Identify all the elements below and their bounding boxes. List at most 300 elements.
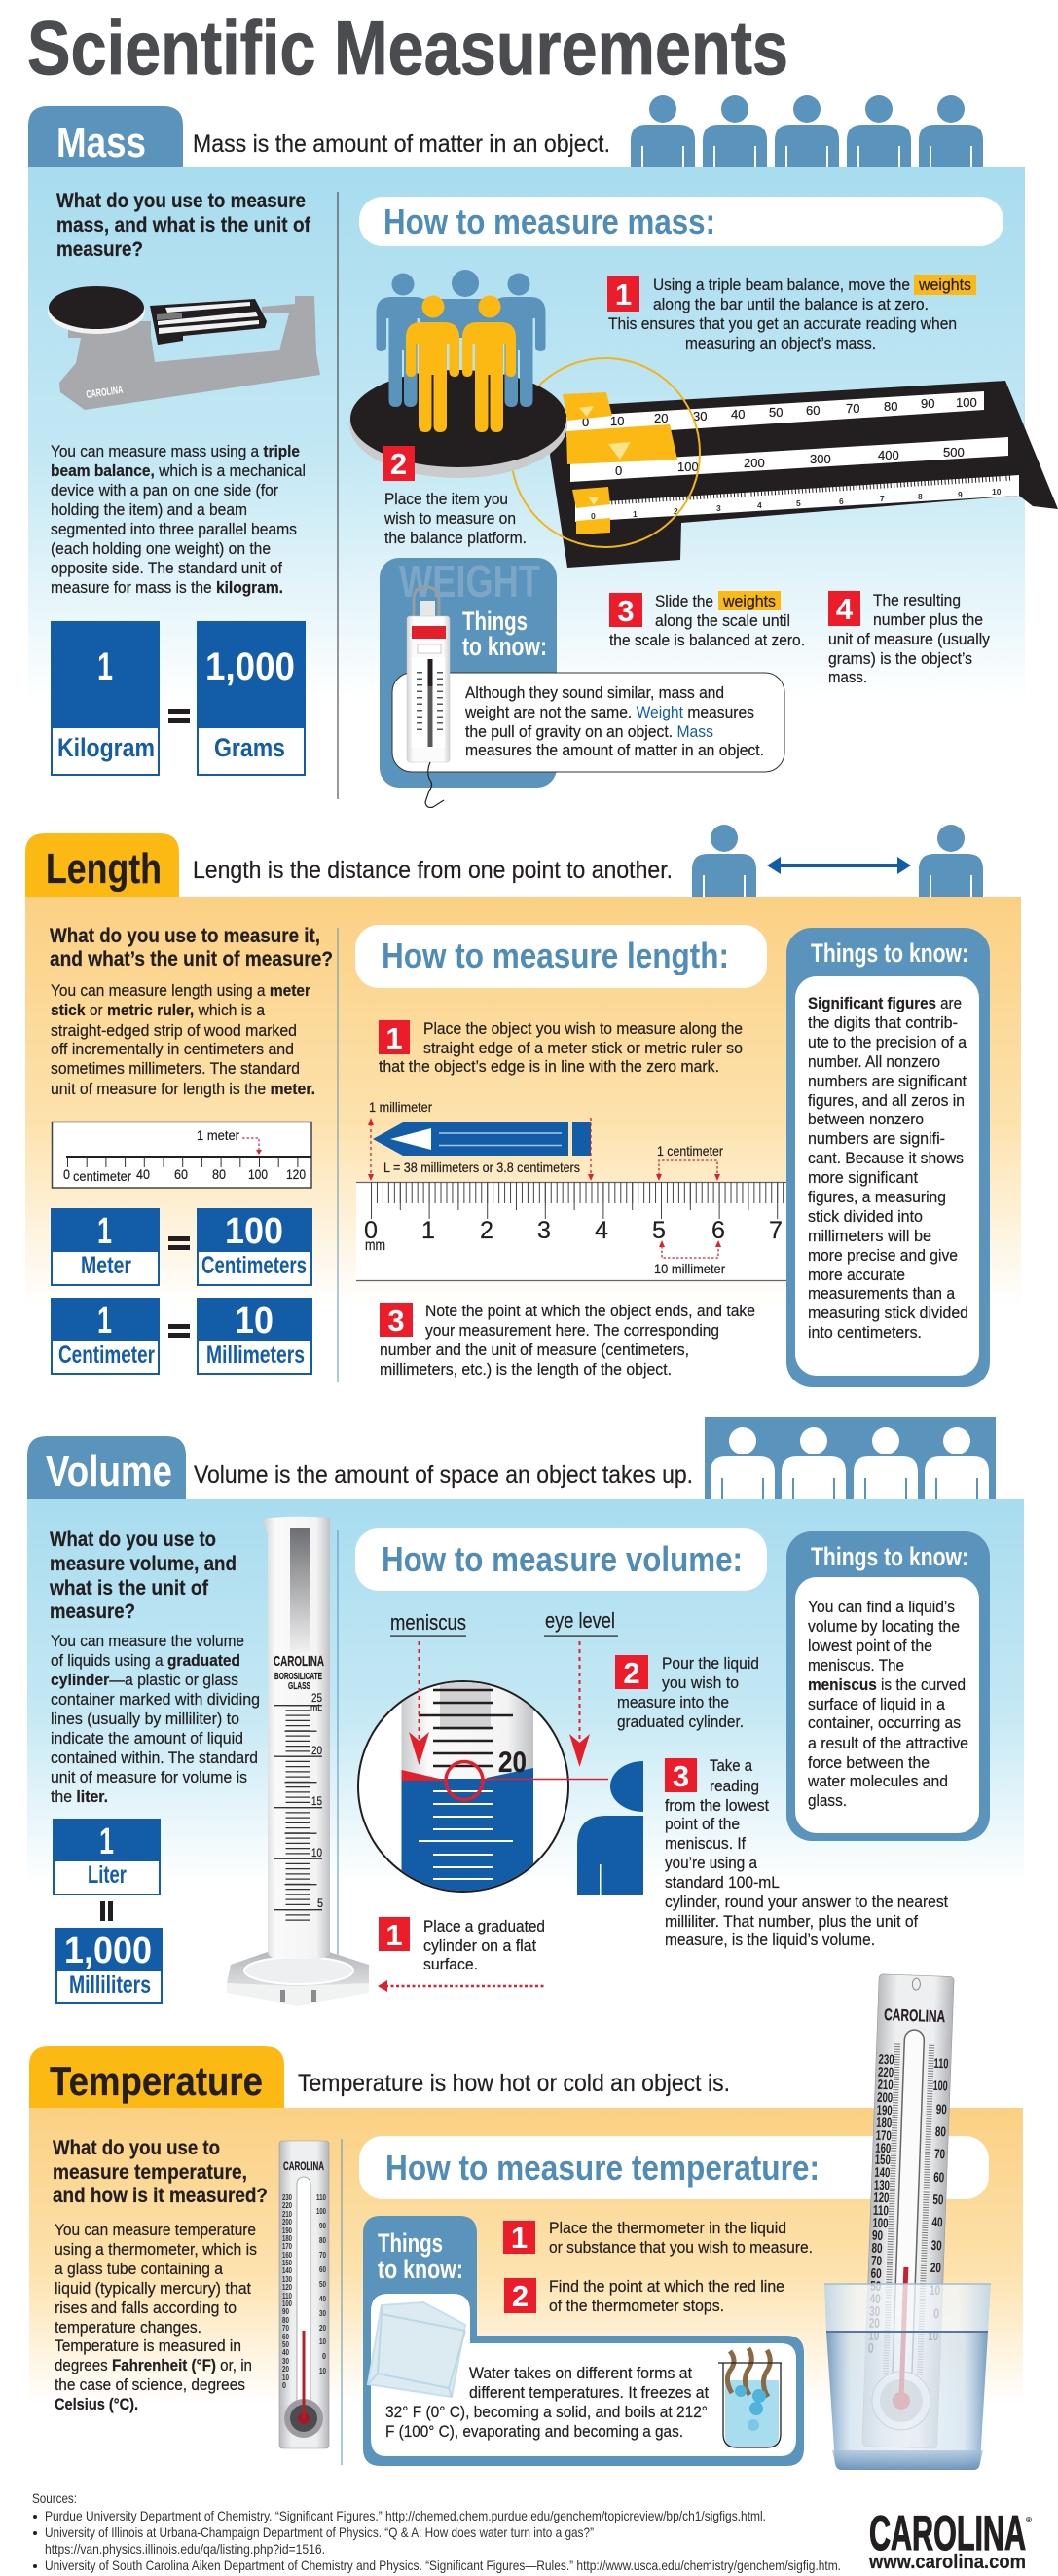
small thermometer: 210 <box>282 2209 292 2219</box>
unit box: 1 centimeter: Centimeter <box>58 1342 155 1369</box>
meniscus and eye level labels with arrows: eye level <box>545 1608 615 1633</box>
unit box: 100 centimeters: Centimeters <box>201 1252 307 1279</box>
unit box: 100 centimeters: 100 <box>225 1211 283 1252</box>
sources: https://van.physics.illinois.edu/qa/listing.php?id=1516. <box>45 2541 325 2557</box>
big thermometer: 120 <box>873 2190 890 2205</box>
volume explanation text: unit of measure for volume is <box>51 1768 247 1786</box>
beam three: 2 <box>674 506 678 516</box>
length step 3: 3 <box>387 1304 405 1338</box>
volume things to know panel <box>786 1531 990 1841</box>
temperature explanation text: You can measure temperature <box>55 2221 256 2239</box>
length tab: Length <box>46 845 162 893</box>
big thermometer: 70 <box>934 2146 946 2161</box>
temperature things to know panel: different temperatures. It freezes at <box>469 2383 709 2402</box>
balance pan with people <box>349 270 567 478</box>
big thermometer: 100 <box>872 2215 889 2230</box>
temperature definition: Temperature is how hot or cold an object is. <box>298 2070 730 2097</box>
beam one: 80 <box>884 399 897 414</box>
length explanation text: off incrementally in centimeters and <box>51 1040 294 1058</box>
unit box: 100 centimeters <box>197 1208 312 1285</box>
carolina logo: ® <box>1026 2516 1032 2524</box>
length things to know panel: measuring stick divided <box>808 1304 968 1322</box>
length question heading <box>50 925 333 971</box>
big thermometer: 40 <box>931 2214 943 2229</box>
mass explanation text: holding the item) and a beam <box>51 500 247 519</box>
volume step 3: you’re using a <box>665 1854 757 1872</box>
how to measure volume heading <box>355 1528 767 1591</box>
big thermometer: 50 <box>932 2191 944 2207</box>
small thermometer: 110 <box>316 2192 326 2202</box>
volume step 3: 3 <box>673 1759 689 1793</box>
length definition: Length is the distance from one point to another. <box>193 857 673 884</box>
small thermometer: 0 <box>282 2380 286 2390</box>
mass step 4: The resulting <box>873 591 961 609</box>
unit box: 1,000 milliliters: 1,000 <box>64 1931 152 1971</box>
temperature things to know panel <box>363 2216 804 2466</box>
length step 1: 1 <box>385 1021 403 1055</box>
weight things to know panel: WEIGHT <box>399 556 540 607</box>
mass step 3: weights <box>722 592 776 610</box>
beam two: 300 <box>810 452 831 466</box>
mass explanation text <box>51 442 306 597</box>
graduated cylinder: 10 <box>311 1846 322 1859</box>
beam one: 90 <box>921 396 934 411</box>
unit box: 1,000 milliliters: Milliliters <box>69 1971 151 1999</box>
equals sign rotated <box>100 1901 113 1921</box>
length things to know panel <box>786 928 990 1387</box>
unit box: 1 meter: 1 <box>97 1211 112 1252</box>
mass step 1: measuring an object’s mass. <box>685 334 876 352</box>
mass step 1: weights <box>918 276 971 294</box>
carolina logo: www.carolina.com <box>868 2552 1026 2573</box>
temperature explanation text: Temperature is measured in <box>55 2337 241 2355</box>
length step 1: that the object’s edge is in line with the zero mark. <box>379 1057 719 1076</box>
weight things to know panel: Things <box>462 607 528 636</box>
temperature tab <box>29 2046 284 2108</box>
volume explanation text: the liter. <box>51 1787 108 1806</box>
mass step 2 <box>383 446 527 547</box>
mass step 1: Using a triple beam balance, move the <box>653 276 910 294</box>
volume step 3: from the lowest <box>665 1796 769 1815</box>
volume step 1 <box>378 1917 545 1992</box>
big thermometer: 80 <box>871 2240 883 2256</box>
big thermometer: 220 <box>878 2064 894 2079</box>
volume step 2: Pour the liquid <box>662 1654 759 1673</box>
temperature step 1 <box>503 2219 813 2257</box>
title: Scientific Measurements <box>27 5 788 91</box>
graduated cylinder: BOROSILICATE <box>274 1672 322 1682</box>
volume step 3: meniscus. If <box>665 1834 746 1853</box>
unit box: 10 millimeters <box>197 1298 312 1374</box>
length step 3: millimeters, etc.) is the length of the object. <box>380 1360 672 1379</box>
temperature step 2 <box>504 2277 784 2315</box>
mass explanation text: beam balance, which is a mechanical <box>51 461 306 480</box>
sources: Purdue University Department of Chemistry. “Significant Figures.” http://chemed.chem.purdue.edu/genchem/topicreview/bp/ch1/sigfigs.html. <box>45 2508 766 2523</box>
length step 3: your measurement here. The corresponding <box>425 1321 719 1340</box>
meniscus and eye level labels with arrows: meniscus <box>390 1610 466 1635</box>
column divider <box>337 192 339 799</box>
small thermometer: 50 <box>282 2339 289 2349</box>
weight callout: measures the amount of matter in an object. <box>465 741 764 759</box>
big thermometer: 170 <box>875 2127 892 2143</box>
beam three: 4 <box>757 500 762 510</box>
beam one: 30 <box>693 409 707 423</box>
graduated cylinder: CAROLINA <box>274 1653 324 1670</box>
mass question heading: mass, and what is the unit of <box>56 214 311 237</box>
mass definition: Mass is the amount of matter in an object. <box>193 130 610 158</box>
unit box: 1 liter <box>53 1819 161 1895</box>
red dashed arrows <box>409 1641 590 1767</box>
beam two: 200 <box>744 456 765 470</box>
small thermometer: 160 <box>282 2250 292 2260</box>
how to measure length heading <box>355 925 767 988</box>
volume explanation text: cylinder—a plastic or glass <box>51 1671 238 1689</box>
mass step 3: the scale is balanced at zero. <box>609 631 805 649</box>
unit box: 1 centimeter: 1 <box>97 1301 112 1342</box>
beam one: 40 <box>731 407 745 422</box>
ruler: mm <box>365 1237 385 1254</box>
small thermometer: 90 <box>282 2306 289 2316</box>
how to measure volume heading: How to measure volume: <box>382 1539 743 1579</box>
volume question heading: measure volume, and <box>50 1553 237 1575</box>
unit box: 1,000 milliliters <box>55 1928 163 2003</box>
small thermometer: 130 <box>282 2274 292 2284</box>
beam three: 5 <box>796 498 801 508</box>
small thermometer: 80 <box>282 2315 289 2325</box>
meter stick diagram: 120 <box>286 1166 306 1182</box>
weight things to know panel <box>380 556 784 807</box>
big thermometer: 50 <box>870 2278 882 2294</box>
temperature step 2: 2 <box>512 2279 529 2313</box>
weight callout: the pull of gravity on an object. Mass <box>465 722 713 741</box>
length step 1: straight edge of a meter stick or metric ruler so <box>423 1039 743 1057</box>
volume step 3: standard 100-mL <box>665 1873 780 1892</box>
small thermometer: 60 <box>319 2264 326 2274</box>
temperature step 1: Place the thermometer in the liquid <box>549 2219 786 2237</box>
small thermometer: 40 <box>282 2347 289 2357</box>
equals sign <box>168 709 190 723</box>
unit box: 1 liter: 1 <box>99 1822 114 1862</box>
weight callout <box>392 673 784 772</box>
small thermometer: 80 <box>319 2235 326 2245</box>
mass step 3: along the scale until <box>655 611 790 630</box>
section: mass <box>28 95 1058 807</box>
beam three: 10 <box>992 487 1002 497</box>
temperature question heading: measure temperature, <box>53 2161 247 2184</box>
length things to know panel: number. All nonzero <box>808 1052 940 1071</box>
unit box: 10 millimeters: Millimeters <box>206 1342 305 1369</box>
volume things to know panel: lowest point of the <box>808 1637 932 1655</box>
beam three: 9 <box>958 490 963 499</box>
ruler: 6 <box>711 1217 725 1244</box>
unit box: 1,000 grams: 1,000 <box>205 645 295 688</box>
temperature explanation text: a glass tube containing a <box>55 2260 223 2278</box>
triple beam balance illustration <box>48 286 320 410</box>
sources <box>32 2490 841 2573</box>
meter stick diagram: 80 <box>212 1166 226 1182</box>
unit box: 1,000 grams: Grams <box>214 733 285 762</box>
unit box: 1 meter <box>51 1208 160 1285</box>
big thermometer: 190 <box>876 2102 893 2117</box>
beam three: 7 <box>880 494 885 503</box>
length things to know panel: into centimeters. <box>808 1323 922 1342</box>
big thermometer: 110 <box>933 2055 949 2071</box>
ruler: 1 <box>421 1217 435 1244</box>
big thermometer: 20 <box>930 2260 941 2275</box>
small thermometer <box>279 2141 329 2448</box>
temperature explanation text: liquid (typically mercury) that <box>55 2279 251 2298</box>
volume step 3: cylinder, round your answer to the nearest <box>665 1893 948 1911</box>
unit box: 1 meter: Meter <box>81 1252 131 1279</box>
volume things to know panel: glass. <box>808 1791 847 1810</box>
big thermometer: 0 <box>933 2305 940 2321</box>
volume step 2: 2 <box>623 1656 640 1690</box>
length explanation text: You can measure length using a meter <box>51 981 310 1000</box>
big thermometer: 60 <box>933 2169 945 2185</box>
volume things to know panel: a result of the attractive <box>808 1734 968 1752</box>
big thermometer: 20 <box>869 2315 880 2331</box>
beam three: 6 <box>839 497 844 506</box>
sources: University of Illinois at Urbana-Champaign Department of Physics. “Q & A: How does water turn into a gas?” <box>45 2524 594 2540</box>
beam three <box>575 474 1019 522</box>
section: volume <box>27 1417 1024 2006</box>
weight things to know panel: to know: <box>462 632 547 661</box>
beam two: 0 <box>615 463 622 478</box>
icon: blue figures <box>376 270 545 407</box>
mass explanation text: (each holding one weight) on the <box>51 539 271 558</box>
small thermometer: 40 <box>319 2294 326 2303</box>
big thermometer: 30 <box>930 2237 942 2253</box>
small thermometer: 150 <box>282 2258 292 2267</box>
glass of water <box>824 2284 991 2470</box>
temperature things to know panel: 32° F (0° C), becoming a solid, and boils at 212° <box>385 2403 708 2421</box>
volume question heading: measure? <box>50 1601 135 1623</box>
meter stick diagram: 60 <box>174 1166 188 1182</box>
volume explanation text: indicate the amount of liquid <box>51 1729 243 1748</box>
length things to know panel: stick divided into <box>808 1207 923 1226</box>
length things to know panel: measurements than a <box>808 1284 956 1303</box>
sources: University of South Carolina Aiken Department of Chemistry and Physics. “Significant Figures—Rules.” http://www.usca.edu/chemistry/genchem/sigfig.htm. <box>45 2558 841 2573</box>
small thermometer: 190 <box>282 2226 292 2235</box>
big thermometer: 180 <box>876 2115 893 2130</box>
yellow weights <box>563 392 677 534</box>
beam two: 100 <box>677 460 699 474</box>
small thermometer: 140 <box>282 2265 292 2275</box>
spring balance <box>407 587 450 807</box>
how to measure temperature heading <box>359 2136 989 2199</box>
icon: ice cube <box>368 2302 465 2397</box>
big thermometer: 210 <box>877 2077 894 2092</box>
beam one: 50 <box>769 405 783 420</box>
mass step 1 <box>607 275 976 352</box>
mass step 2: wish to measure on <box>383 509 516 528</box>
length question heading: and what’s the unit of measure? <box>50 948 333 971</box>
small thermometer: 100 <box>282 2299 292 2308</box>
beam three: 1 <box>633 509 638 519</box>
unit box: 1,000 grams <box>197 621 306 775</box>
length things to know panel: cant. Because it shows <box>808 1149 964 1167</box>
length things to know panel: numbers are signifi- <box>808 1129 945 1148</box>
length things to know panel: more precise and give <box>808 1246 958 1265</box>
small thermometer: 120 <box>282 2282 292 2292</box>
beam one: 20 <box>654 411 668 425</box>
beam one: 100 <box>956 395 977 410</box>
magnified meniscus view: 20 <box>498 1747 527 1779</box>
mass step 3: 3 <box>617 594 635 628</box>
length explanation text: straight-edged strip of wood marked <box>51 1021 297 1040</box>
length explanation text: stick or metric ruler, which is a <box>51 1001 265 1019</box>
weight callout: Although they sound similar, mass and <box>465 683 724 702</box>
length explanation text <box>51 981 315 1098</box>
magnifier circle <box>511 358 700 547</box>
meter stick diagram: 1 meter <box>197 1127 239 1143</box>
mass step 3 <box>609 591 805 649</box>
small thermometer: 70 <box>319 2250 326 2260</box>
mass tab <box>28 106 183 167</box>
meter stick diagram: 40 <box>136 1166 150 1182</box>
temperature explanation text <box>55 2221 257 2413</box>
beam one: 10 <box>610 414 624 428</box>
length things to know panel: figures, and all zeros in <box>808 1091 965 1110</box>
temperature panel background <box>29 2108 1023 2405</box>
meter stick diagram: 0 <box>63 1166 70 1182</box>
volume step 2: you wish to <box>662 1674 739 1692</box>
volume explanation text <box>51 1632 260 1806</box>
big thermometer: 0 <box>868 2340 874 2356</box>
small thermometer: 100 <box>316 2206 326 2216</box>
mass step 4: number plus the <box>873 610 983 629</box>
ruler <box>356 1182 786 1281</box>
sources: Sources: <box>32 2490 77 2506</box>
unit box: 1 kilogram: Kilogram <box>57 733 155 762</box>
volume things to know panel: Things to know: <box>811 1542 968 1571</box>
length question heading: What do you use to measure it, <box>50 925 320 947</box>
volume panel background <box>27 1499 1024 1884</box>
big thermometer: 100 <box>932 2078 948 2093</box>
temperature explanation text: degrees Fahrenheit (°F) or, in <box>55 2356 252 2374</box>
beam one: 60 <box>806 403 820 418</box>
big thermometer: 140 <box>874 2164 891 2180</box>
beam one <box>566 391 984 437</box>
icon: person viewing <box>577 1761 643 1895</box>
ruler: 7 <box>769 1217 783 1244</box>
meter stick diagram: centimeter <box>73 1168 131 1184</box>
temperature explanation text: the case of science, degrees <box>55 2375 245 2394</box>
mass step 2: Place the item you <box>384 490 508 508</box>
mass explanation text: measure for mass is the kilogram. <box>51 578 283 597</box>
unit box: 1 kilogram: 1 <box>97 645 113 688</box>
volume step 1: surface. <box>423 1955 478 1973</box>
big thermometer: 60 <box>870 2265 882 2281</box>
big thermometer: 80 <box>935 2123 946 2139</box>
length things to know panel: more significant <box>808 1168 918 1187</box>
volume explanation text: of liquids using a graduated <box>51 1651 240 1670</box>
volume step 3: point of the <box>665 1815 740 1833</box>
temperature things to know panel: Things <box>378 2228 443 2258</box>
graduated cylinder: mL <box>310 1703 322 1712</box>
ruler: 5 <box>652 1217 666 1244</box>
small thermometer: 20 <box>319 2323 326 2333</box>
small thermometer: 110 <box>282 2291 292 2300</box>
temperature things to know panel: F (100° C), evaporating and becoming a gas. <box>385 2422 683 2441</box>
how to measure length heading: How to measure length: <box>382 936 729 975</box>
volume things to know panel: You can find a liquid’s <box>808 1598 955 1616</box>
icon: two people with arrow <box>692 825 983 897</box>
small thermometer: 230 <box>282 2192 292 2202</box>
temperature step 2: of the thermometer stops. <box>549 2297 724 2315</box>
volume step 2: graduated cylinder. <box>617 1712 744 1731</box>
volume step 1: cylinder on a flat <box>423 1936 536 1955</box>
beam three: 3 <box>716 503 721 513</box>
meniscus and eye level labels with arrows <box>390 1608 618 1637</box>
equals sign <box>168 1236 190 1250</box>
graduated cylinder: 20 <box>311 1744 322 1757</box>
ruler: 2 <box>480 1217 493 1244</box>
eye level line <box>483 1778 608 1780</box>
small thermometer: 70 <box>282 2323 289 2333</box>
volume things to know panel: force between the <box>808 1753 930 1772</box>
ruler: 4 <box>595 1217 608 1244</box>
temperature tab: Temperature <box>50 2058 263 2104</box>
triple beam balance illustration: CAROLINA <box>86 385 124 401</box>
temperature step 1: or substance that you wish to measure. <box>549 2238 813 2257</box>
length things to know panel: numbers are significant <box>808 1072 967 1090</box>
volume question heading: what is the unit of <box>49 1577 209 1600</box>
big thermometer in glass of water <box>824 1974 991 2470</box>
magnified meniscus view <box>358 1681 568 1895</box>
mass step 4 <box>828 591 990 686</box>
graduated cylinder <box>227 1517 369 2006</box>
pencil diagram <box>368 1099 723 1181</box>
big thermometer <box>862 1974 954 2448</box>
length step 1: Place the object you wish to measure along the <box>423 1019 743 1038</box>
volume things to know panel: meniscus is the curved <box>808 1675 966 1694</box>
volume step 2: measure into the <box>617 1693 729 1711</box>
mass step 4: mass. <box>828 668 867 686</box>
volume definition: Volume is the amount of space an object takes up. <box>194 1461 693 1489</box>
mass question heading <box>56 190 311 261</box>
big thermometer: 40 <box>869 2291 881 2306</box>
icon: five people <box>631 95 983 167</box>
small thermometer: 30 <box>319 2308 326 2318</box>
volume explanation text: contained within. The standard <box>51 1748 258 1767</box>
length panel background <box>25 897 1021 1306</box>
small thermometer: 170 <box>282 2241 292 2251</box>
beam three: 0 <box>591 511 596 521</box>
graduated cylinder: 25 <box>311 1691 322 1705</box>
big thermometer: 110 <box>873 2202 889 2218</box>
volume things to know panel: meniscus. The <box>808 1656 904 1674</box>
temperature things to know panel: to know: <box>378 2255 463 2284</box>
section: temperature <box>29 1974 1023 2470</box>
big thermometer: 30 <box>869 2303 881 2319</box>
section: length <box>25 825 1021 1387</box>
weight callout: weight are not the same. Weight measures <box>464 703 754 721</box>
mass step 3: Slide the <box>655 592 713 610</box>
length things to know panel: figures, a measuring <box>808 1188 946 1206</box>
volume step 3 <box>665 1756 948 1949</box>
big thermometer: 130 <box>874 2177 890 2192</box>
length things to know panel: Things to know: <box>811 938 968 968</box>
unit box: 1 kilogram <box>51 621 160 775</box>
temperature step 2: Find the point at which the red line <box>549 2277 784 2296</box>
temperature question heading: What do you use to <box>53 2137 220 2159</box>
temperature step 1: 1 <box>511 2221 528 2255</box>
volume question heading <box>49 1528 237 1623</box>
beam two <box>570 437 1008 482</box>
big thermometer: 160 <box>875 2140 892 2155</box>
beam three: 8 <box>918 492 923 501</box>
